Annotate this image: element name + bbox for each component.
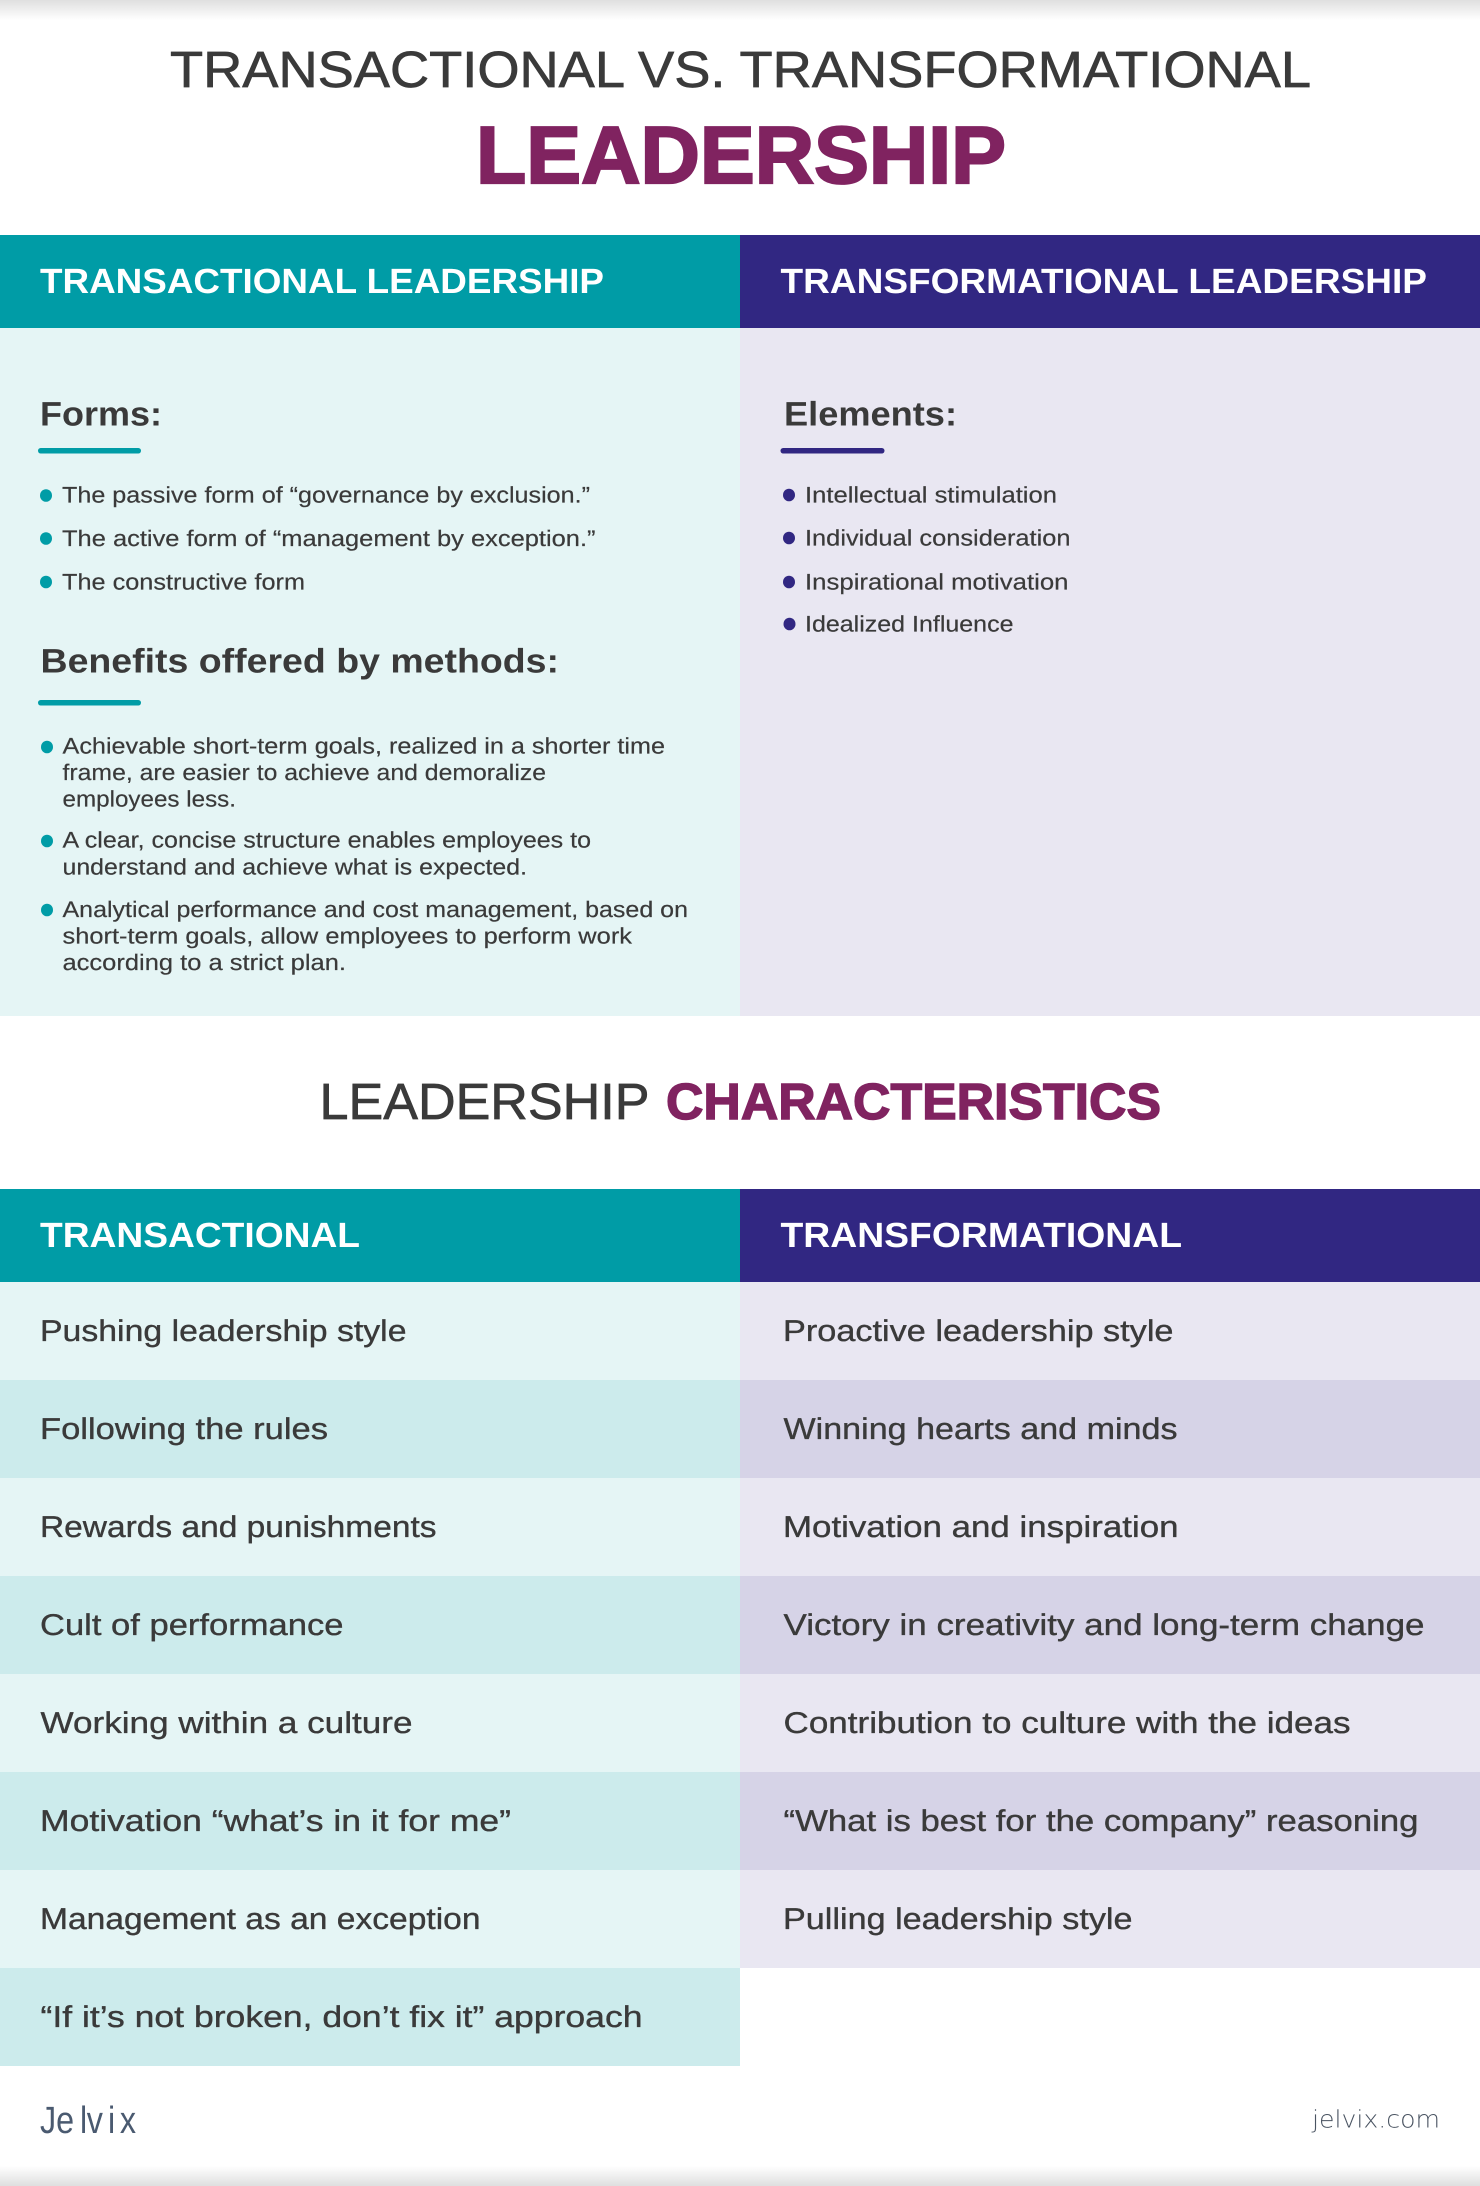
section heading: leadership characteristics: LEADERSHIP — [320, 1073, 650, 1130]
row: motivation what's in it for me — [0, 1772, 740, 1870]
row: proactive leadership style: Proactive leadership style — [783, 1315, 1174, 1348]
row: if it's not broken — [0, 1968, 740, 2066]
row: victory in creativity: Victory in creativity and long-term change — [784, 1609, 1424, 1642]
list: benefits: short-term goals, allow employees to perform work — [62, 924, 633, 948]
row: working within a culture: Working within a culture — [40, 1707, 412, 1740]
row: motivation what's in it for me: Motivation “what’s in it for me” — [40, 1805, 511, 1838]
column header: transformational: TRANSFORMATIONAL — [780, 1216, 1182, 1255]
heading: benefits offered by methods: Benefits offered by methods: — [40, 642, 559, 680]
header band: transformational leadership: TRANSFORMATIONAL LEADERSHIP — [780, 262, 1427, 301]
row: pulling leadership style — [740, 1870, 1480, 1968]
row: motivation and inspiration: Motivation and inspiration — [783, 1511, 1178, 1544]
row: following the rules: Following the rules — [40, 1413, 328, 1446]
row: proactive leadership style — [740, 1282, 1480, 1380]
panel background — [0, 328, 740, 1016]
header band: transactional leadership: TRANSACTIONAL LEADERSHIP — [40, 262, 604, 301]
row: motivation and inspiration — [740, 1478, 1480, 1576]
row: cult of performance — [0, 1576, 740, 1674]
row: following the rules — [0, 1380, 740, 1478]
row: rewards and punishments: Rewards and punishments — [40, 1511, 436, 1544]
row: what is best for the company — [740, 1772, 1480, 1870]
row: winning hearts and minds: Winning hearts and minds — [784, 1413, 1178, 1446]
list: benefits: frame, are easier to achieve and demoralize — [62, 760, 546, 785]
list: benefits: employees less. — [62, 786, 236, 812]
list: elements: Inspirational motivation — [805, 570, 1068, 594]
row: rewards and punishments — [0, 1478, 740, 1576]
panel: transformational leadership — [740, 235, 1480, 1016]
list: benefits — [41, 734, 688, 975]
column header: transactional — [0, 1189, 740, 1282]
list: elements — [783, 482, 1070, 636]
footer url: jelvix.com: jelvix.com — [1311, 2106, 1440, 2134]
list: elements: Individual consideration — [805, 526, 1070, 550]
heading: benefits offered by methods — [38, 642, 559, 706]
heading: elements — [780, 396, 957, 454]
row: management as an exception — [0, 1870, 740, 1968]
row: contribution to culture — [740, 1674, 1480, 1772]
row: pulling leadership style: Pulling leadership style — [783, 1903, 1132, 1936]
section heading: leadership characteristics — [320, 1073, 1161, 1130]
column header: transactional: TRANSACTIONAL — [40, 1216, 360, 1255]
panel background — [740, 328, 1480, 1016]
list: benefits: Achievable short-term goals, realized in a shorter time — [62, 734, 665, 758]
header band: transformational leadership — [740, 235, 1480, 328]
row: working within a culture — [0, 1674, 740, 1772]
heading: forms — [38, 396, 162, 454]
header band: transactional leadership — [0, 235, 740, 328]
list: benefits: according to a strict plan. — [62, 950, 346, 975]
row: what is best for the company: “What is best for the company” reasoning — [784, 1805, 1418, 1838]
row: cult of performance: Cult of performance — [40, 1609, 344, 1642]
heading: elements: Elements: — [784, 396, 957, 434]
row: pushing leadership style: Pushing leadership style — [40, 1315, 406, 1348]
column header: transformational — [740, 1189, 1480, 1282]
row: winning hearts and minds — [740, 1380, 1480, 1478]
list: elements: Idealized Influence — [805, 612, 1014, 636]
row: victory in creativity — [740, 1576, 1480, 1674]
list: benefits: A clear, concise structure enables employees to — [62, 828, 591, 852]
list: elements: Intellectual stimulation — [805, 482, 1057, 508]
title line: transactional vs. transformational: TRANSACTIONAL VS. TRANSFORMATIONAL — [170, 41, 1311, 98]
title line: leadership: LEADERSHIP — [476, 111, 1006, 201]
list: benefits: understand and achieve what is expected. — [62, 854, 527, 880]
row: if it's not broken: “If it’s not broken, don’t fix it” approach — [40, 2001, 642, 2034]
logo: Jelvix: Jelvix — [40, 2100, 136, 2142]
row: contribution to culture: Contribution to culture with the ideas — [784, 1707, 1350, 1740]
section heading: leadership characteristics: CHARACTERISTICS — [666, 1073, 1161, 1130]
list: forms: The active form of “management by exception.” — [62, 526, 596, 551]
title — [170, 41, 1311, 201]
table column: transformational — [740, 1189, 1480, 1968]
list: forms: The constructive form — [62, 570, 305, 594]
row: management as an exception: Management as an exception — [40, 1903, 480, 1936]
list: forms — [40, 482, 596, 594]
list: forms: The passive form of “governance by exclusion.” — [62, 482, 590, 508]
panel: transactional leadership — [0, 235, 740, 1016]
table column: transactional — [0, 1189, 740, 2066]
heading: forms: Forms: — [40, 396, 162, 434]
list: benefits: Analytical performance and cost management, based on — [62, 897, 688, 922]
row: pushing leadership style — [0, 1282, 740, 1380]
